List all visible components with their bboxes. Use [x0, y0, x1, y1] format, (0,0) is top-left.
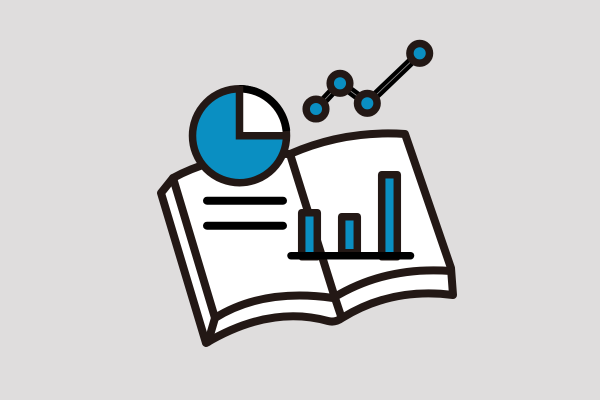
baseline: [291, 252, 410, 259]
data point 2: [330, 74, 350, 93]
bar 1: [302, 213, 317, 257]
bar 3: [382, 175, 397, 257]
icon: pie chart: [192, 86, 288, 183]
icon: open book: [161, 133, 453, 343]
data point 4: [410, 44, 430, 63]
bar chart: [291, 175, 410, 257]
line chart: [306, 44, 430, 119]
bar 2: [342, 217, 357, 253]
data point 3: [358, 94, 377, 113]
text lines on left page: [207, 201, 283, 226]
data point 1: [306, 99, 326, 119]
